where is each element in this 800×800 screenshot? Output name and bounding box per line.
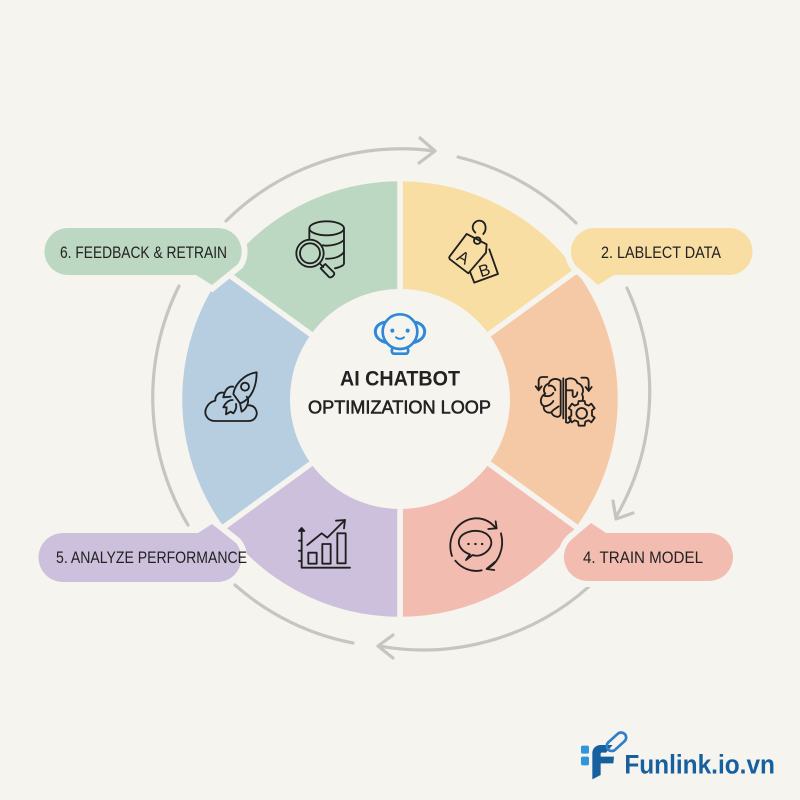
pill: 4 train model: 4. TRAIN MODEL bbox=[583, 549, 703, 567]
icon: bar chart with trend arrow bbox=[299, 520, 350, 568]
title bbox=[308, 366, 491, 418]
arc: left bbox=[153, 286, 188, 525]
title: AI CHATBOT bbox=[340, 366, 460, 390]
pill: 6 feedback and retrain: 6. FEEDBACK & RETRAIN bbox=[60, 244, 227, 262]
ring segments bbox=[179, 178, 621, 620]
logo: Funlink.io.vn: Funlink.io.vn bbox=[624, 749, 775, 779]
arc: top right bbox=[458, 157, 576, 223]
icon: database with magnifier bbox=[296, 221, 344, 277]
pill: 2 lablect data bbox=[571, 228, 753, 285]
logo: Funlink.io.vn bbox=[581, 730, 775, 779]
icon: A B tags: B bbox=[476, 260, 493, 281]
arc: bottom left bbox=[235, 585, 353, 643]
pill: 4 train model bbox=[564, 523, 733, 581]
icon: brain and gear bbox=[536, 377, 595, 426]
pill: 5 analyze performance bbox=[38, 524, 247, 582]
icon: chat with circular arrows bbox=[450, 518, 502, 571]
pill: 2 lablect data: 2. LABLECT DATA bbox=[601, 244, 721, 262]
center circle bbox=[290, 289, 510, 509]
icon: robot head bbox=[375, 314, 425, 354]
segment: lilac bbox=[222, 462, 400, 620]
segment: blue bbox=[179, 269, 313, 529]
arrow: bottom bbox=[378, 579, 597, 658]
segment: green bbox=[222, 178, 400, 336]
segment: pink bbox=[400, 462, 578, 620]
icon: rocket and cloud bbox=[205, 372, 257, 421]
title: OPTIMIZATION LOOP bbox=[308, 398, 491, 418]
pill: 6 feedback and retrain bbox=[44, 228, 242, 285]
segment: orange bbox=[487, 269, 621, 529]
segment: yellow bbox=[400, 178, 578, 336]
pill: 5 analyze performance: 5. ANALYZE PERFORMANCE bbox=[56, 549, 247, 567]
cycle arrows ring bbox=[153, 138, 650, 658]
arrow: top bbox=[226, 138, 435, 221]
arrow: right bbox=[613, 288, 650, 519]
icon: A B tags bbox=[449, 221, 498, 283]
icon: A B tags: A bbox=[454, 246, 474, 269]
